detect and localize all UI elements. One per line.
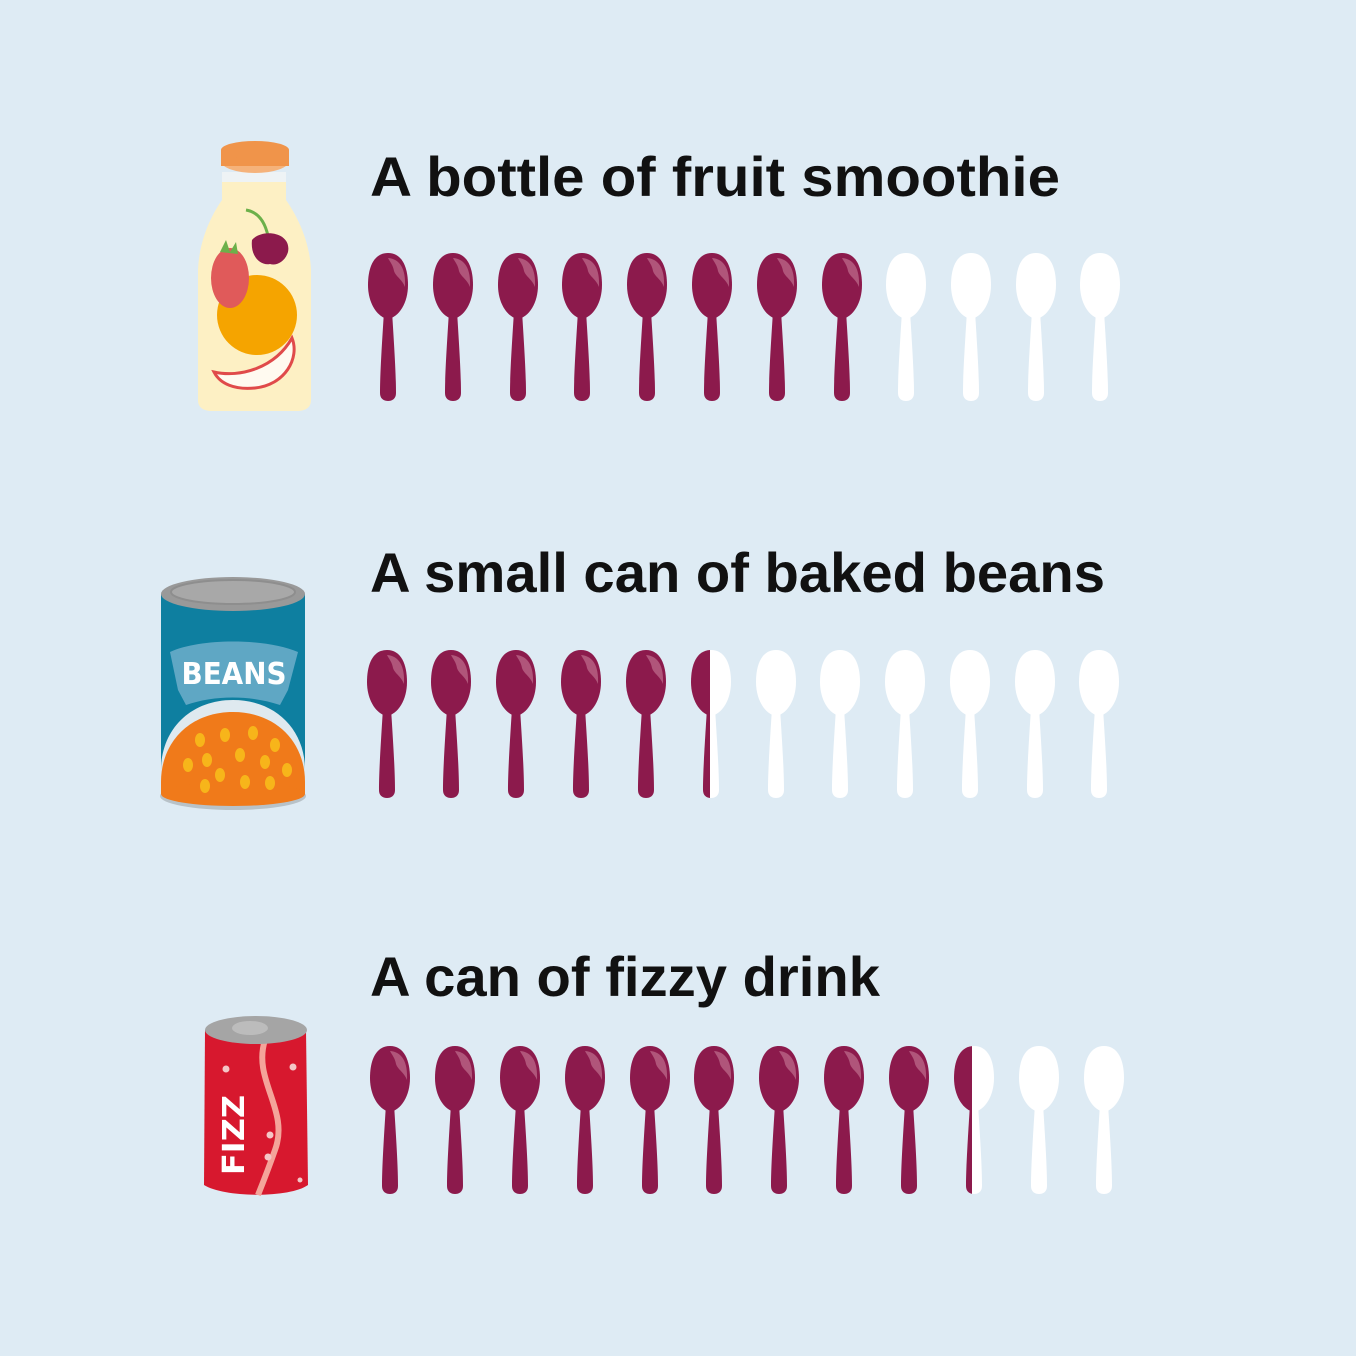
title: smoothie: A bottle of fruit smoothie xyxy=(370,145,1060,208)
icon: fizzy can xyxy=(204,1016,308,1195)
icon: smoothie bottle xyxy=(198,141,311,411)
title: fizzy drink: A can of fizzy drink xyxy=(370,945,881,1008)
title: beans: A small can of baked beans xyxy=(370,541,1105,604)
spoons: beans 6 of 12 (half) xyxy=(367,650,1119,798)
icon: beans can: BEANS xyxy=(182,657,286,692)
icon: beans can xyxy=(160,577,306,810)
icon: fizzy can: FIZZ xyxy=(217,1095,252,1175)
spoons: smoothie 8 of 12 xyxy=(368,253,1120,401)
spoons: fizzy 9.x of 12 xyxy=(370,1046,1124,1194)
